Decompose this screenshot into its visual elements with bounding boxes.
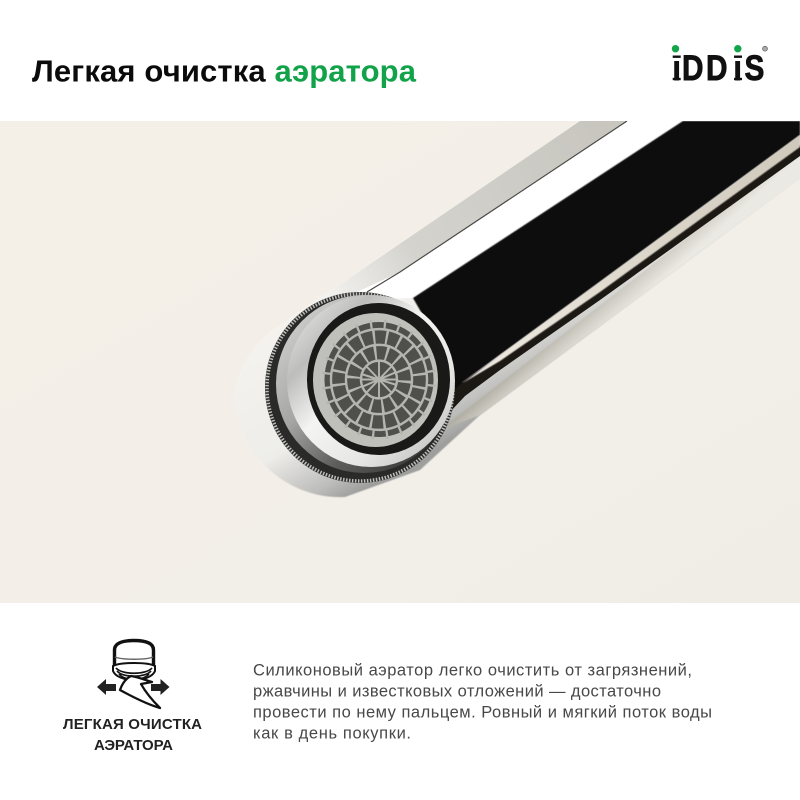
description text xyxy=(253,662,712,743)
icon caption: ЛЕГКАЯ ОЧИСТКА xyxy=(63,716,202,733)
aerator collar xyxy=(265,292,455,483)
description text: Силиконовый аэратор легко очистить от загрязнений, xyxy=(253,662,692,680)
description text: провести по нему пальцем. Ровный и мягкий поток воды xyxy=(253,704,712,722)
title: Легкая очистка аэратора xyxy=(32,54,417,88)
logo: IDDIS: ıDDıS xyxy=(673,49,764,88)
spout body xyxy=(235,121,800,497)
panel: photo of faucet spout with aerator xyxy=(0,121,800,603)
aerator mesh xyxy=(313,313,438,447)
icon: aerator cleaning with a finger xyxy=(97,640,170,708)
icon caption xyxy=(63,716,202,754)
description text: ржавчины и известковых отложений — достаточно xyxy=(253,683,661,701)
icon caption: АЭРАТОРА xyxy=(94,737,173,754)
description text: как в день покупки. xyxy=(253,725,411,743)
